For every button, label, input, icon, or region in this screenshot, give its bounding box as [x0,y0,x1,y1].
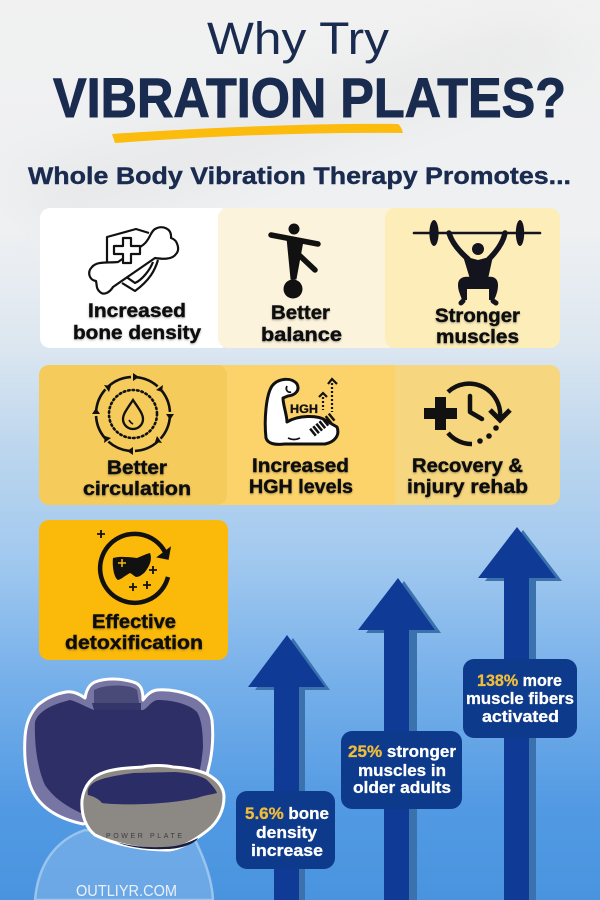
label: better balance [261,303,342,346]
label: better circulation [83,458,191,500]
callout: 25% stronger muscles [341,731,462,809]
callout: 5.6% bone density [236,791,335,869]
label: effective detoxification [65,612,203,654]
callout: 138% more muscle fibers: activated [482,708,559,726]
yellow underline [112,124,403,143]
title [53,13,566,129]
callout: 138% more muscle fibers: 138% more [477,672,562,690]
label: increased bone density: Increased [88,301,186,322]
label: recovery and injury rehab: Recovery & [412,456,523,477]
large plate [25,679,213,824]
label: increased HGH levels [249,456,353,498]
label: recovery and injury rehab [407,456,528,498]
icon: figure balancing on ball [271,224,318,298]
icon: liver with cycle arrow [97,530,170,603]
label: better circulation: circulation [83,479,191,500]
label: increased bone density [73,301,201,344]
callout: 5.6% bone density: 5.6% bone [245,805,329,823]
callout: 5.6% bone density: density [256,824,318,842]
label: increased bone density: bone density [73,323,201,344]
callout: 25% stronger muscles: muscles in [358,762,446,780]
watermark: OUTLIYR.COM [76,883,177,900]
label: increased HGH levels: Increased [252,456,349,477]
callout: 138% more muscle fibers [463,659,577,738]
reflection of plates [35,830,213,900]
icon: clock with plus [424,384,510,444]
label: better balance: Better [271,303,331,324]
image: vibration plates: POWER PLATE [106,833,182,840]
panel: stronger muscles [385,208,560,348]
label: better balance: balance [261,325,342,346]
panel: better balance [218,208,398,348]
small plate [82,766,224,850]
callout: 25% stronger muscles: 25% stronger [348,743,457,761]
panel: increased HGH levels [215,365,395,505]
label: effective detoxification: detoxification [65,633,203,654]
label: increased HGH levels: HGH levels [249,477,353,498]
callout: 5.6% bone density: increase [251,842,323,860]
label: stronger muscles [435,306,521,348]
panel: effective detoxification [39,520,228,660]
panel: recovery and injury rehab [380,365,560,505]
callout: 138% more muscle fibers: muscle fibers [466,690,574,708]
arrow: muscle fibers [478,527,562,900]
image: vibration plates [25,679,224,850]
arrow: bone density [248,635,330,900]
label: stronger muscles: muscles [436,327,519,348]
arrow: stronger muscles [358,578,441,900]
label: stronger muscles: Stronger [435,306,521,327]
label: recovery and injury rehab: injury rehab [407,477,528,498]
title: Why Try [207,13,390,64]
callout: 25% stronger muscles: older adults [353,779,451,797]
icon: circulating drop [92,373,174,455]
subtitle: Whole Body Vibration Therapy Promotes... [28,163,571,190]
icon: weightlifter [414,220,540,303]
label: effective detoxification: Effective [92,612,176,633]
icon: flexed arm with HGH: HGH [290,402,318,416]
icon: bone and shield [89,227,178,294]
panel: increased bone density [40,208,230,348]
panel: better circulation [39,365,227,505]
label: better circulation: Better [107,458,168,479]
icon: flexed arm with HGH [265,379,338,444]
